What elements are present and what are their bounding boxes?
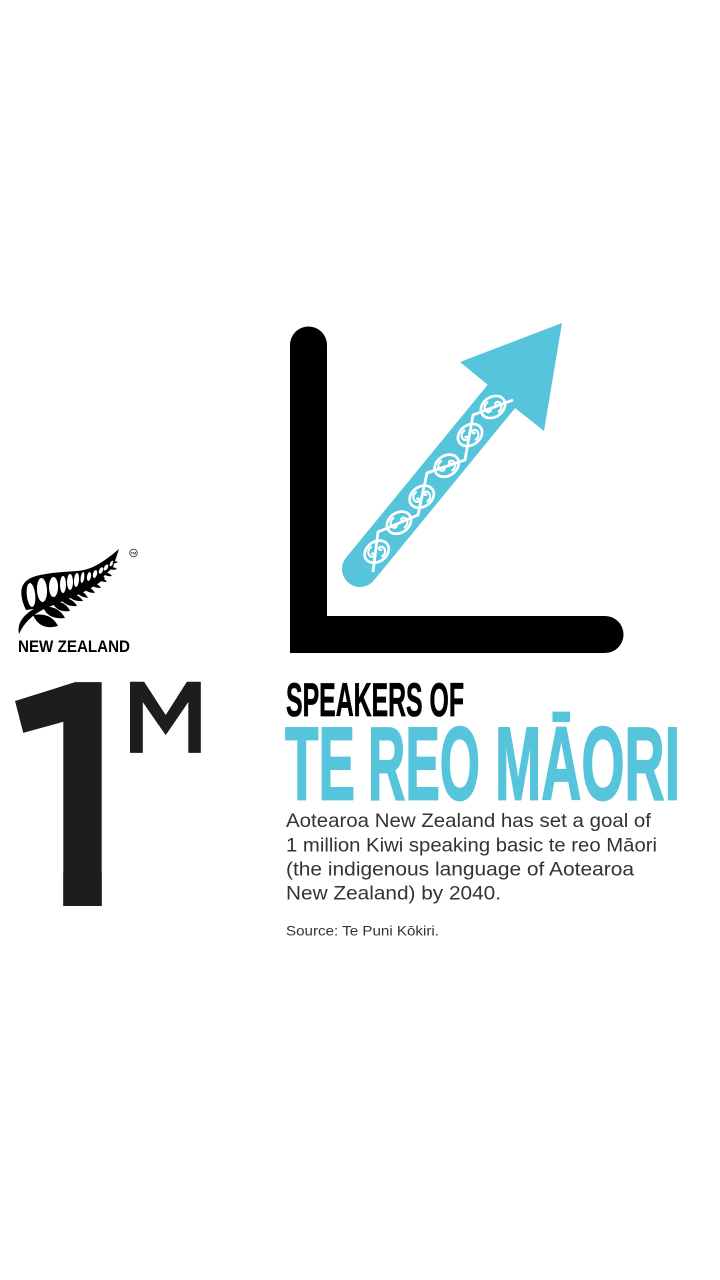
body text: (the indigenous language of Aotearoa bbox=[286, 858, 634, 880]
koru pattern bbox=[360, 391, 513, 572]
body text: 1 million Kiwi speaking basic te reo Māori bbox=[286, 834, 657, 856]
logo: New Zealand fern mark bbox=[18, 549, 137, 656]
icon: rising arrow with koru pattern bbox=[360, 323, 562, 572]
big number: 1M bbox=[15, 682, 201, 906]
icon: trademark: TM bbox=[131, 550, 137, 556]
source note: Source: Te Puni Kōkiri. bbox=[286, 922, 439, 938]
heading: te reo maori: TE bbox=[285, 706, 355, 822]
chart axes bbox=[308, 345, 605, 634]
unit M: M bbox=[123, 660, 209, 775]
heading: te reo maori: REO bbox=[368, 706, 480, 822]
body text: Aotearoa New Zealand has set a goal of bbox=[286, 810, 652, 832]
numeral 1: 1 bbox=[0, 610, 152, 975]
body text bbox=[286, 810, 657, 904]
heading: te reo maori bbox=[285, 706, 680, 822]
heading: speakers of: SPEAKERS OF bbox=[286, 673, 464, 726]
logo wordmark: NEW ZEALAND bbox=[18, 638, 130, 656]
icon: silver fern bbox=[19, 549, 119, 634]
body text: New Zealand) by 2040. bbox=[286, 882, 501, 904]
